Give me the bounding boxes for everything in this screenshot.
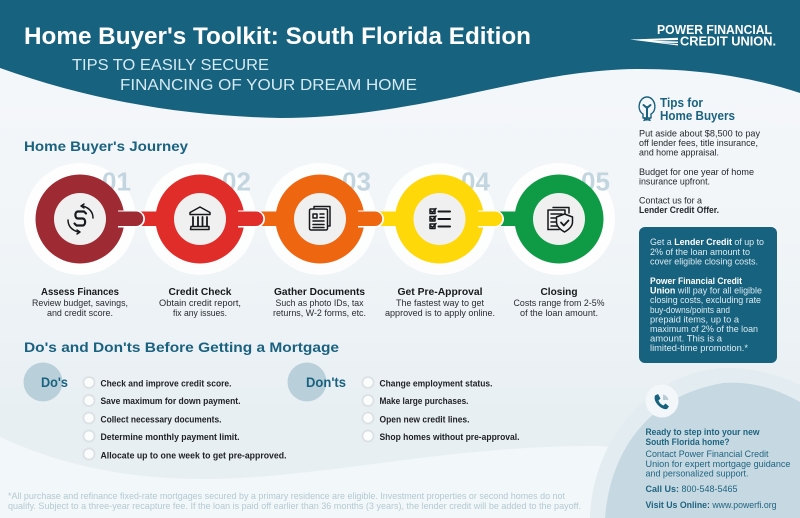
caption 1 bbox=[32, 286, 128, 318]
don'ts list: Shop homes without pre-approval. bbox=[380, 432, 520, 442]
heading: Do's and Don'ts: Do's and Don'ts Before Getting a Mortgage bbox=[24, 339, 339, 355]
connector 1 to 2 bbox=[118, 210, 145, 228]
tips heading bbox=[660, 96, 735, 123]
subtitle bbox=[72, 57, 417, 94]
step 1 circle bbox=[36, 174, 124, 264]
lender credit panel: prepaid items, up to a bbox=[650, 314, 740, 324]
header banner bbox=[0, 0, 800, 118]
contact text: Ready to step into your new bbox=[646, 426, 760, 437]
connector 3 to 4 bbox=[358, 210, 384, 228]
do's list: Collect necessary documents. bbox=[100, 414, 222, 424]
icon: checklist bbox=[430, 208, 450, 228]
lender credit panel: limited-time promotion.* bbox=[650, 342, 748, 353]
contact panel bbox=[590, 368, 800, 518]
tip 2: Budget for one year of home bbox=[639, 166, 754, 177]
tip 1: Put aside about $8,500 to pay bbox=[639, 128, 760, 138]
lender credit panel bbox=[639, 227, 777, 363]
step numbers: 04 bbox=[461, 166, 490, 196]
lender credit panel: Get a Lender Credit of up to bbox=[650, 236, 764, 247]
title: Home Buyer's Toolkit: South Florida Edition bbox=[24, 23, 531, 50]
lender credit panel: 2% of the loan amount to bbox=[650, 246, 750, 257]
caption 5: of the loan amount. bbox=[520, 308, 598, 318]
step 3 circle bbox=[255, 174, 364, 264]
lender credit panel: Union will pay for all eligible bbox=[650, 284, 762, 296]
heading: Home Buyer's Journey: Home Buyer's Journey bbox=[24, 138, 188, 154]
tip 1: off lender fees, title insurance, bbox=[639, 137, 758, 148]
caption 3: Gather Documents bbox=[274, 286, 365, 298]
don'ts list bbox=[362, 376, 520, 442]
lender credit panel: Power Financial Credit bbox=[650, 275, 742, 286]
tips heading: Home Buyers bbox=[660, 109, 735, 123]
caption 2: Credit Check bbox=[168, 286, 232, 298]
lender credit panel: cover eligible closing costs. bbox=[650, 256, 758, 266]
icon: documents bbox=[310, 206, 330, 230]
do's badge: Do's bbox=[41, 374, 68, 390]
icon: dollar with arrows bbox=[68, 204, 93, 234]
do's badge bbox=[24, 362, 68, 402]
caption 4: approved is to apply online. bbox=[385, 308, 495, 318]
icon: light bulb bbox=[639, 97, 655, 120]
logo: Power Financial Credit Union: POWER FINANCIAL bbox=[657, 22, 772, 37]
do's list: Check and improve credit score. bbox=[100, 378, 232, 388]
step numbers bbox=[102, 166, 610, 196]
contact text bbox=[646, 426, 790, 510]
tip 2 bbox=[639, 166, 754, 186]
caption 2 bbox=[159, 286, 241, 318]
step 5 circle bbox=[495, 174, 604, 264]
caption 3 bbox=[273, 286, 366, 318]
step numbers: 05 bbox=[581, 166, 610, 196]
tip 1 bbox=[639, 128, 760, 158]
tip 3 bbox=[639, 194, 719, 215]
connector 4 to 5 bbox=[478, 210, 504, 228]
tips panel bbox=[639, 96, 760, 215]
step 2 circle bbox=[135, 174, 244, 264]
subtitle: TIPS TO EASILY SECURE bbox=[72, 57, 269, 74]
caption 4: Get Pre-Approval bbox=[398, 286, 483, 298]
caption 1: Review budget, savings, bbox=[32, 298, 128, 308]
tip 1: and home appraisal. bbox=[639, 146, 719, 158]
contact text: Call Us: 800-548-5465 bbox=[646, 483, 738, 494]
footnote bbox=[8, 491, 581, 511]
don'ts badge bbox=[288, 362, 346, 402]
icon: bank bbox=[190, 207, 210, 230]
contact text: and personalized support. bbox=[646, 468, 748, 478]
tip 3: Lender Credit Offer. bbox=[639, 204, 719, 215]
caption 2: fix any issues. bbox=[173, 308, 227, 318]
footnote: *All purchase and refinance fixed-rate mortgages secured by a primary residence are eligible. Investment properties or second homes do not bbox=[8, 491, 565, 501]
caption 3: Such as photo IDs, tax bbox=[276, 298, 364, 308]
contact backdrop outer bbox=[590, 368, 800, 518]
contact backdrop inner bbox=[605, 383, 800, 518]
journey steps bbox=[24, 163, 615, 275]
step captions bbox=[32, 286, 604, 318]
caption 5 bbox=[514, 286, 604, 318]
do's list: Allocate up to one week to get pre-approved. bbox=[100, 450, 286, 460]
subtitle: FINANCING OF YOUR DREAM HOME bbox=[120, 77, 417, 94]
don'ts list: Make large purchases. bbox=[380, 396, 468, 406]
caption 5: Closing bbox=[540, 286, 578, 298]
step numbers: 02 bbox=[222, 166, 251, 196]
lender credit panel: closing costs, excluding rate bbox=[650, 294, 761, 305]
step numbers: 03 bbox=[342, 166, 371, 196]
tip 2: insurance upfront. bbox=[639, 176, 710, 186]
lender credit panel: maximum of 2% of the loan bbox=[650, 323, 758, 334]
don'ts badge: Don'ts bbox=[306, 374, 346, 390]
tip 3: Contact us for a bbox=[639, 194, 703, 206]
caption 3: returns, W-2 forms, etc. bbox=[273, 308, 366, 318]
contact text: South Florida home? bbox=[646, 436, 730, 447]
tips heading: Tips for bbox=[660, 96, 703, 110]
do's list bbox=[83, 376, 286, 460]
icon: phone bbox=[646, 384, 678, 418]
lender credit panel: amount. This is a bbox=[650, 332, 723, 344]
connector 2 to 3 bbox=[238, 210, 265, 228]
contact text: Union for expert mortgage guidance bbox=[646, 458, 790, 469]
caption 4 bbox=[385, 286, 495, 318]
do's list: Determine monthly payment limit. bbox=[100, 432, 240, 442]
caption 1: Assess Finances bbox=[41, 286, 119, 298]
caption 1: and credit score. bbox=[47, 308, 113, 318]
contact text: Visit Us Online: www.powerfi.org bbox=[646, 499, 776, 510]
caption 5: Costs range from 2-5% bbox=[514, 298, 604, 308]
logo: Power Financial Credit Union bbox=[630, 22, 776, 48]
don'ts list: Change employment status. bbox=[380, 378, 492, 388]
white halos behind steps bbox=[24, 163, 615, 275]
step numbers: 01 bbox=[102, 166, 131, 196]
don'ts list: Open new credit lines. bbox=[380, 414, 470, 424]
caption 2: Obtain credit report, bbox=[159, 298, 241, 308]
step 4 circle bbox=[375, 174, 484, 264]
logo: Power Financial Credit Union: CREDIT UNION. bbox=[680, 34, 776, 48]
lender credit panel: buy-downs/points and bbox=[650, 304, 730, 315]
contact text: Contact Power Financial Credit bbox=[646, 448, 769, 459]
icon: shield document bbox=[548, 208, 572, 232]
caption 4: The fastest way to get bbox=[396, 298, 484, 308]
do's list: Save maximum for down payment. bbox=[100, 396, 240, 406]
lower background wave bbox=[0, 437, 800, 518]
footnote: qualify. Subject to a three-year recapture fee. If the loan is paid off earlier than 36 months (3 years), the lender credit will be added to the payoff. bbox=[8, 501, 581, 511]
